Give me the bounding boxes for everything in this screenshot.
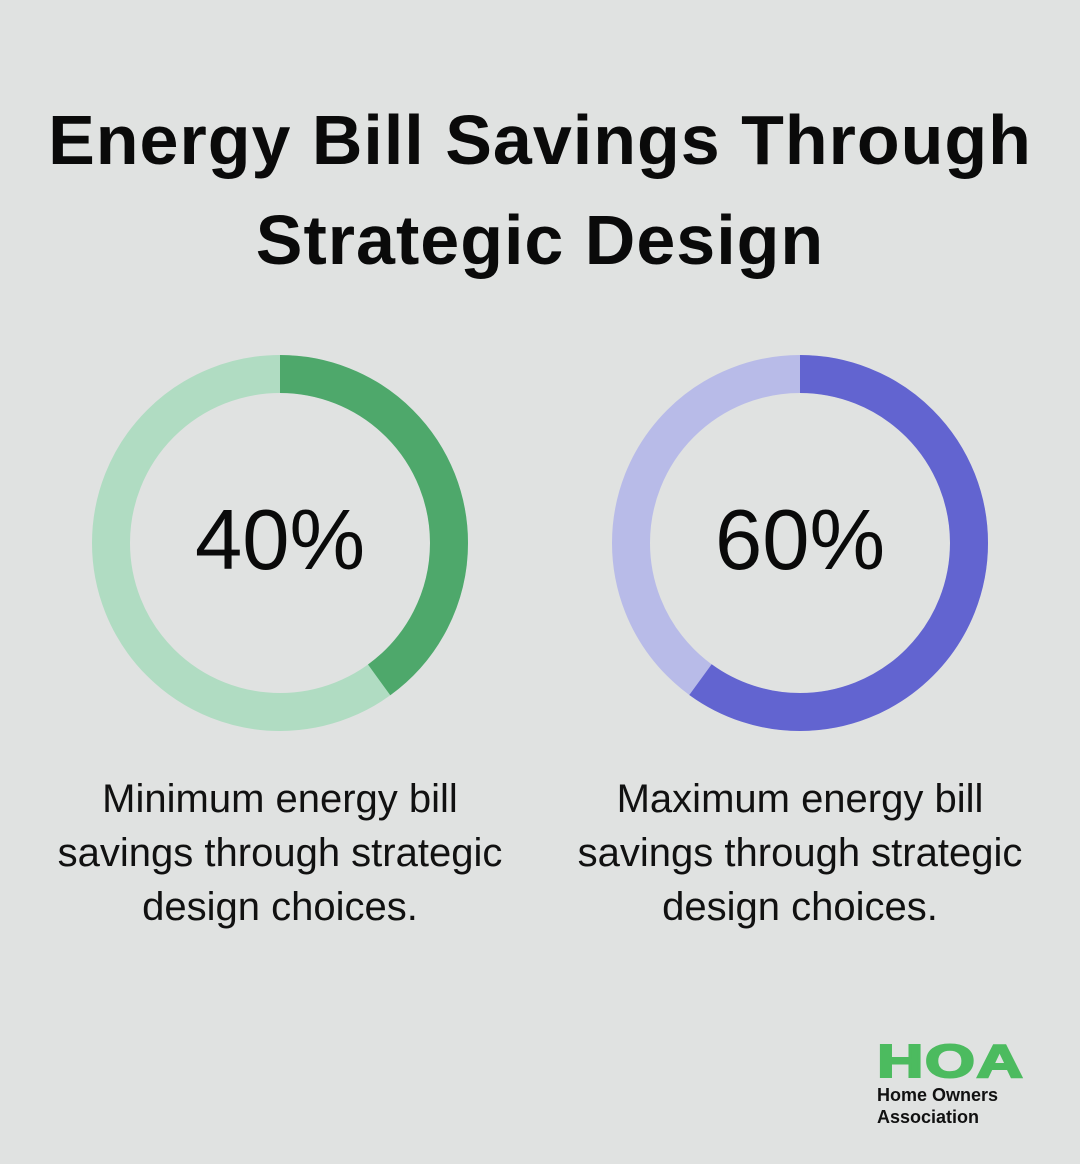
donut: 40% — [111, 374, 449, 712]
text: minimum: design choices. — [142, 885, 418, 929]
text: minimum: savings through strategic — [58, 831, 502, 875]
donut: 40%: 40% — [195, 493, 365, 588]
text: maximum: savings through strategic — [578, 831, 1022, 875]
logo: Home Owners — [877, 1085, 998, 1105]
logo: Association — [877, 1107, 979, 1127]
title — [48, 101, 1032, 279]
text: minimum: Minimum energy bill — [102, 777, 458, 821]
chart: donuts — [92, 355, 988, 731]
logo — [877, 1035, 1024, 1127]
title: Strategic Design — [256, 201, 824, 279]
donut: 60%: 60% — [715, 493, 885, 588]
text: minimum — [58, 777, 502, 929]
logo: HOA — [877, 1035, 1024, 1087]
title: Energy Bill Savings Through — [48, 101, 1032, 179]
text: maximum — [578, 777, 1022, 929]
text: maximum: Maximum energy bill — [617, 777, 983, 821]
donut: 60% — [631, 374, 969, 712]
text: maximum: design choices. — [662, 885, 938, 929]
